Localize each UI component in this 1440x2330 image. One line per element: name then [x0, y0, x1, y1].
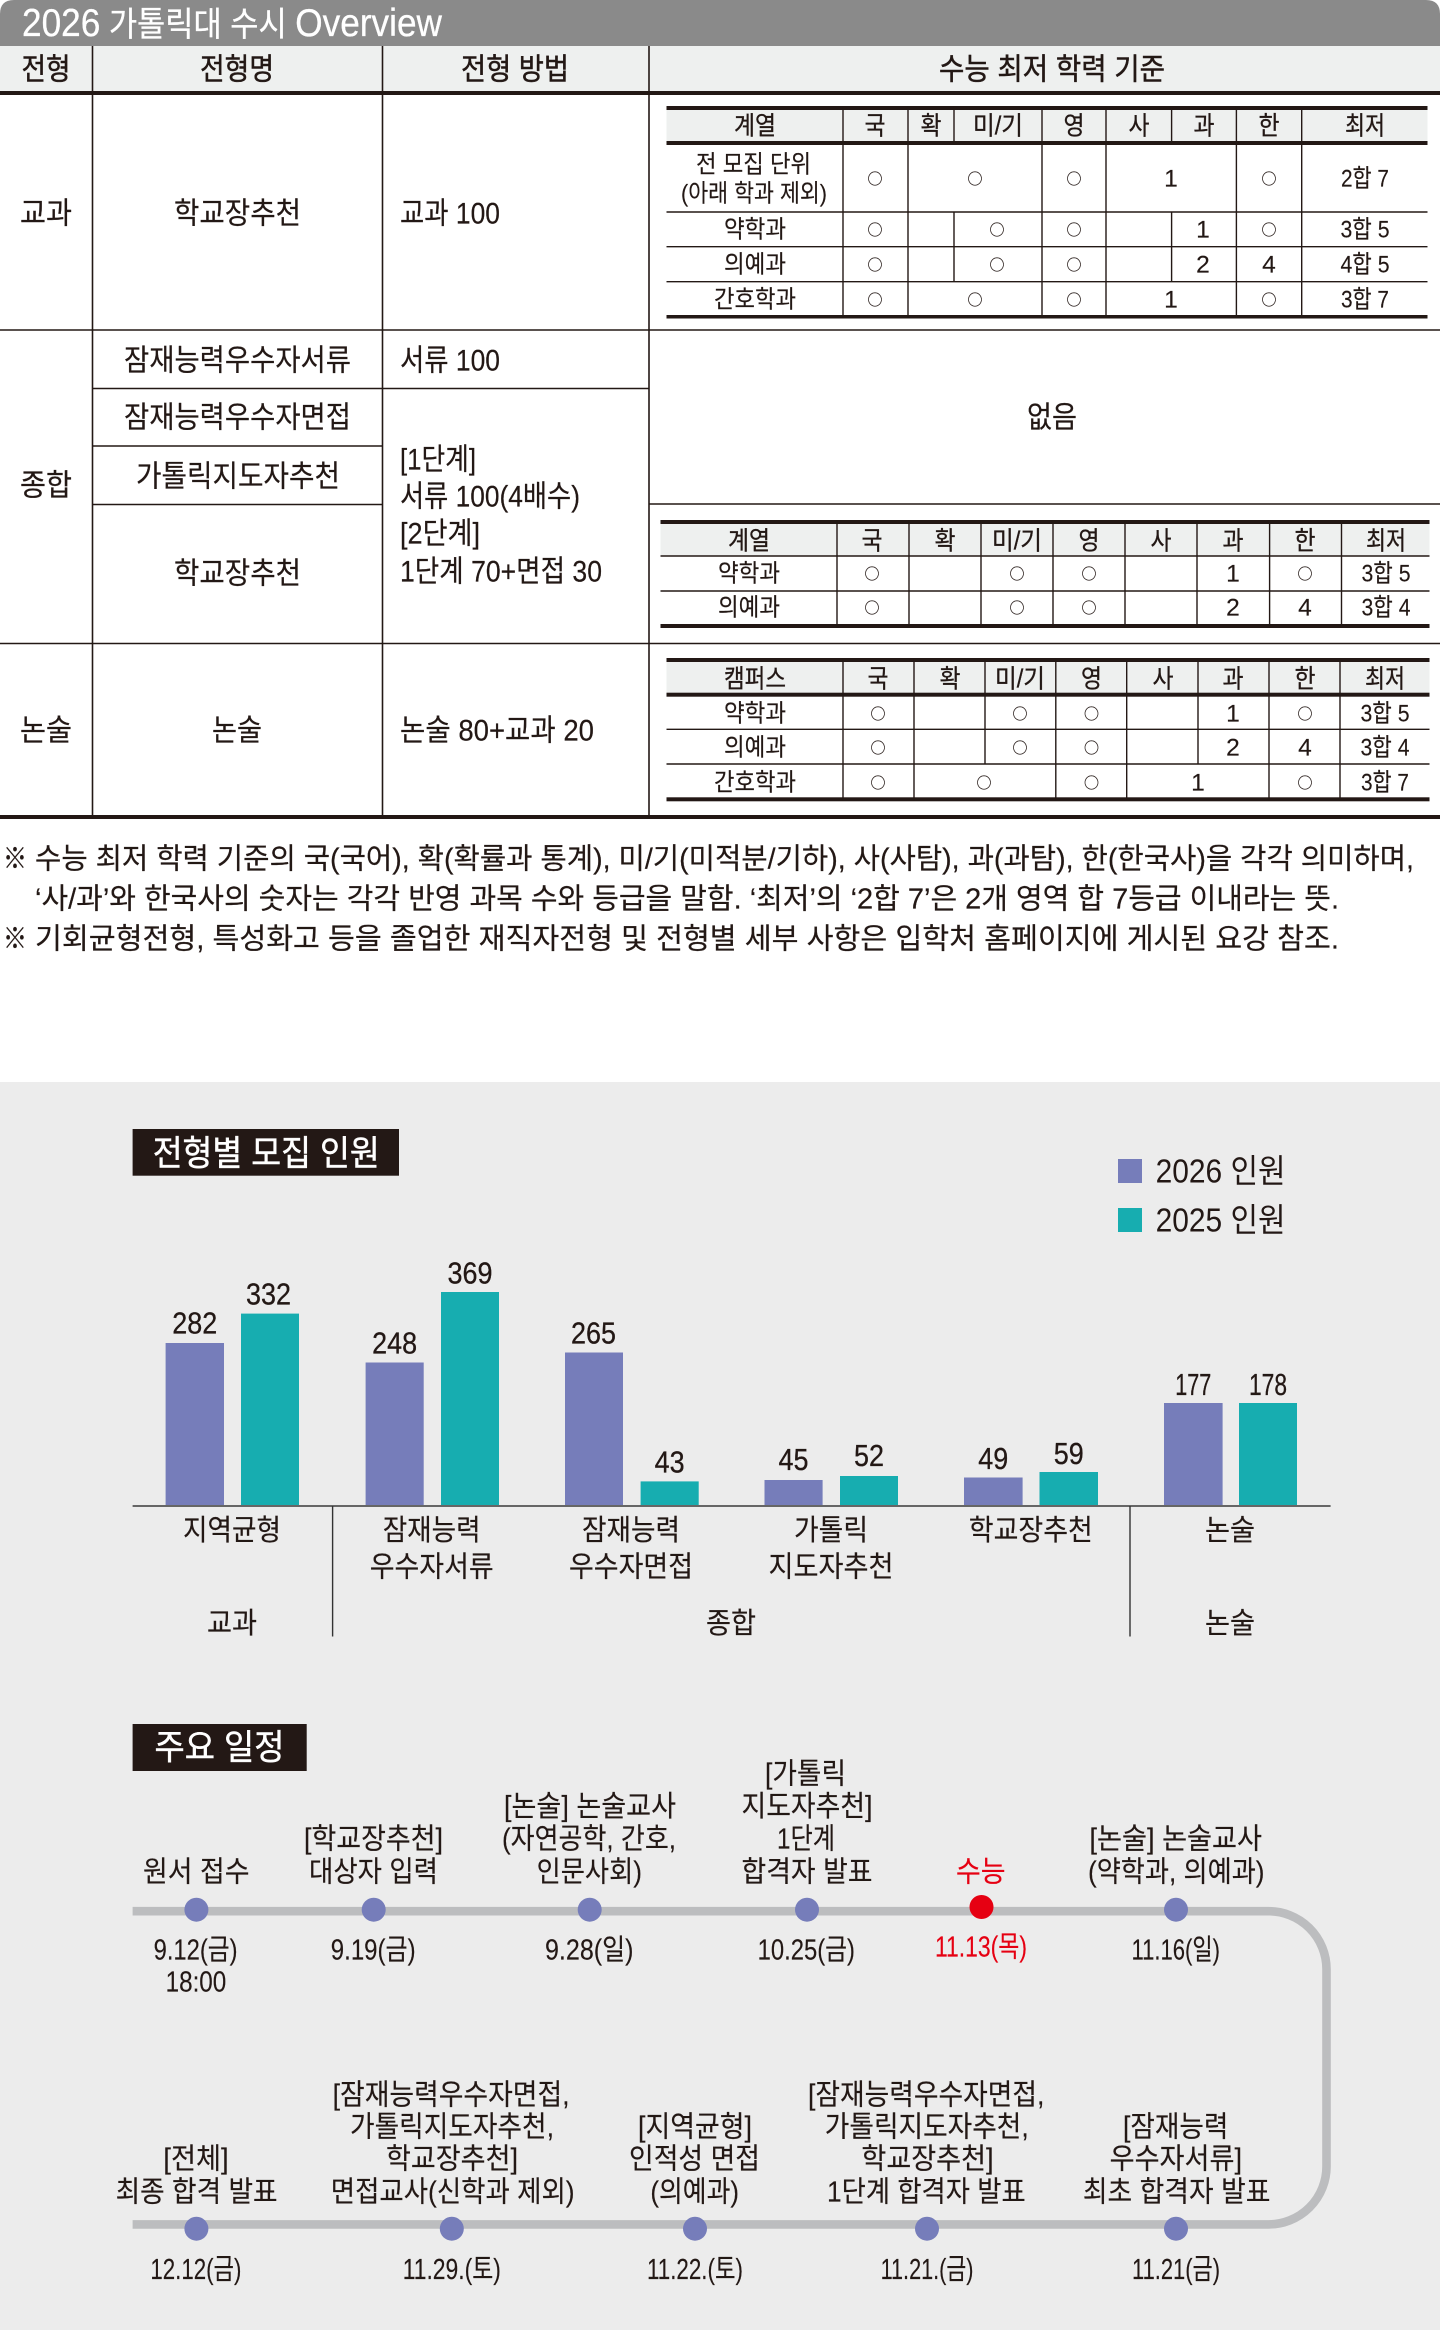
event: first stage results: 11.21.(금) [881, 2254, 974, 2286]
sub-table: 논술 minimum requirements: 확 [940, 665, 960, 693]
admission type names: 논술 [212, 715, 262, 748]
sub-table: 교과 minimum requirements: ○ [1066, 289, 1082, 310]
sub-table: 교과 minimum requirements: 국 [864, 112, 886, 140]
chart category labels: 잠재능력 [383, 1515, 481, 1547]
admission type names: 잠재능력우수자면접 [124, 402, 351, 435]
sub-table: 교과 minimum requirements: 계열 [734, 112, 776, 140]
no minimum requirement label: 없음 [1027, 402, 1077, 435]
sub-table: 학교장추천 minimum requirements: 한 [1294, 527, 1316, 555]
selection methods: 서류 100 [400, 345, 500, 378]
admission type names: 학교장추천 [174, 198, 301, 231]
table grid lines [0, 46, 1440, 819]
event: school recommendation input: 9.19(금) [331, 1935, 416, 1967]
sub-table: 교과 minimum requirements: 최저 [1345, 112, 1385, 140]
table header row: 수능 최저 학력 기준 [939, 54, 1165, 87]
chart category labels: 잠재능력 [582, 1515, 680, 1547]
bar chart: 59 [1054, 1436, 1084, 1471]
event: final results: 12.12(금) [150, 2254, 241, 2286]
sub-table: 논술 minimum requirements: ○ [1084, 772, 1099, 793]
event: essay test 11.16: (약학과, 의예과) [1088, 1856, 1264, 1889]
sub-table: 교과 minimum requirements: 2합 7 [1341, 164, 1389, 192]
sub-table: 논술 minimum requirements: 4 [1298, 734, 1312, 761]
selection methods: 교과 100 [400, 198, 500, 231]
sub-table: 논술 minimum requirements: 국 [868, 665, 888, 693]
heading: key schedule [133, 1724, 307, 1771]
table header row: 전형 방법 [461, 54, 569, 87]
sub-table: 교과 minimum requirements: 1 [1164, 286, 1178, 313]
panel: admissions overview table [0, 0, 1440, 819]
sub-table: 학교장추천 minimum requirements: 1 [1226, 560, 1240, 587]
admission type names: 학교장추천 [174, 558, 301, 591]
sub-table: 논술 minimum requirements: ○ [1084, 737, 1099, 758]
selection methods: [1단계] [400, 444, 476, 477]
sub-table: 논술 minimum requirements: ○ [1084, 703, 1099, 724]
text block: footnotes: ※ [3, 844, 27, 876]
sub-table: 교과 minimum requirements: 한 [1258, 112, 1280, 140]
event: document screening results: 우수자서류] [1110, 2144, 1242, 2176]
sub-table: 논술 minimum requirements: ○ [976, 772, 992, 793]
sub-table: 논술 minimum requirements: ○ [1012, 703, 1028, 724]
event: catholic leader first stage: 1단계 [777, 1823, 835, 1856]
sub-table: 논술 minimum requirements: 미/기 [995, 665, 1045, 693]
sub-table: 학교장추천 minimum requirements: 3합 5 [1362, 559, 1410, 587]
sub-table: 논술 minimum requirements: 간호학과 [714, 768, 796, 796]
bar chart: 282 [172, 1305, 217, 1340]
sub-table: 교과 minimum requirements: 3합 7 [1341, 285, 1389, 313]
event: catholic leader first stage: 합격자 발표 [742, 1857, 872, 1889]
sub-table: 교과 minimum requirements: (아래 학과 제외) [681, 179, 827, 207]
sub-table: 학교장추천 minimum requirements: ○ [1297, 563, 1313, 584]
chart group labels: 논술 [1205, 1608, 1255, 1640]
text block: footnotes [3, 843, 1414, 956]
sub-table: 학교장추천 minimum requirements: 약학과 [718, 559, 780, 587]
bar chart: 178 [1249, 1367, 1287, 1402]
event: interview [331, 2078, 575, 2286]
event: catholic leader first stage [742, 1758, 872, 1967]
bar chart: 52 [854, 1438, 884, 1473]
sub-table: 교과 minimum requirements: ○ [1261, 219, 1277, 240]
timeline dots [184, 1895, 1188, 2241]
sub-table: 논술 minimum requirements: 약학과 [724, 699, 786, 727]
sub-table: 논술 minimum requirements: 3합 5 [1360, 699, 1410, 727]
sub-table: 교과 minimum requirements: 사 [1128, 112, 1150, 140]
sub-table: 교과 minimum requirements: 간호학과 [714, 285, 796, 313]
bar chart: 45 [778, 1442, 808, 1477]
event: aptitude interview: 11.22.(토) [647, 2254, 743, 2286]
sub-table: 교과 minimum requirements: ○ [1066, 168, 1082, 189]
event: document screening results: 11.21(금) [1132, 2254, 1220, 2286]
chart category labels: 논술 [1205, 1515, 1255, 1547]
event: essay test 9.28: 인문사회) [537, 1856, 642, 1889]
sub-table: 학교장추천 minimum requirements [660, 520, 1430, 628]
panel: gray background [0, 1082, 1440, 2330]
sub-table: 논술 minimum requirements: ○ [1297, 703, 1313, 724]
event: catholic leader first stage: [가톨릭 [765, 1758, 846, 1790]
sub-table: 학교장추천 minimum requirements: 확 [934, 527, 956, 555]
sub-table: 교과 minimum requirements: ○ [989, 254, 1005, 275]
sub-table: 논술 minimum requirements: ○ [870, 737, 886, 758]
event: aptitude interview: (의예과) [650, 2177, 739, 2209]
event: first stage results: 학교장추천] [861, 2143, 994, 2176]
legend: 2026 인원 [1156, 1152, 1286, 1190]
bar chart [133, 1255, 1331, 1507]
sub-table: 논술 minimum requirements: 사 [1152, 665, 1174, 693]
event: essay test 9.28: 9.28(일) [545, 1935, 634, 1967]
table header row [0, 46, 1440, 95]
sub-table: 학교장추천 minimum requirements: ○ [1081, 563, 1097, 584]
event: aptitude interview [629, 2111, 760, 2286]
bar chart: 177 [1175, 1367, 1211, 1402]
chart category labels: 지역균형 [183, 1514, 281, 1547]
event: catholic leader first stage: 지도자추천] [742, 1791, 872, 1823]
event: interview: 면접교사(신학과 제외) [331, 2176, 575, 2209]
text block: footnotes: 기회균형전형, 특성화고 등을 졸업한 재직자전형 및 전형별 세부 사항은 입학처 홈페이지에 게시된 요강 참조. [35, 923, 1339, 956]
event: CSAT: 11.13(목) [935, 1932, 1027, 1964]
event: interview: 가톨릭지도자추천, [350, 2112, 554, 2144]
event: catholic leader first stage: 10.25(금) [758, 1935, 855, 1967]
event: interview: 학교장추천] [386, 2143, 518, 2176]
event: application [143, 1857, 250, 1999]
sub-table: 학교장추천 minimum requirements: ○ [1009, 563, 1025, 584]
bar chart: 332 [246, 1276, 291, 1311]
sub-table: 교과 minimum requirements: 1 [1164, 165, 1178, 192]
event: essay test 11.16 [1088, 1824, 1264, 1967]
event: first stage results: 가톨릭지도자추천, [825, 2112, 1029, 2144]
event: aptitude interview: [지역균형] [638, 2111, 752, 2144]
sub-table: 교과 minimum requirements: 약학과 [724, 215, 786, 243]
sub-table: 학교장추천 minimum requirements: 미/기 [992, 527, 1042, 555]
sub-table: 논술 minimum requirements: ○ [1297, 772, 1313, 793]
text block: footnotes: ‘사/과’와 한국사의 숫자는 각각 반영 과목 수와 등급을 말함. ‘최저’의 ‘2합 7’은 2개 영역 합 7등급 이내라는 뜻. [35, 884, 1339, 916]
sub-table: 학교장추천 minimum requirements: 2 [1226, 594, 1240, 621]
sub-table: 교과 minimum requirements: 3합 5 [1340, 215, 1390, 243]
sub-table: 교과 minimum requirements: 확 [920, 112, 942, 140]
sub-table: 교과 minimum requirements: 과 [1194, 112, 1214, 140]
sub-table: 교과 minimum requirements: ○ [967, 289, 983, 310]
sub-table: 논술 minimum requirements: 한 [1294, 665, 1316, 693]
sub-table: 학교장추천 minimum requirements: 계열 [728, 527, 770, 555]
event: application: 9.12(금) [154, 1935, 238, 1967]
legend: 2025 인원 [1156, 1202, 1286, 1238]
sub-table: 교과 minimum requirements: 전 모집 단위 [696, 150, 811, 178]
sub-table: 논술 minimum requirements [666, 658, 1430, 801]
bar chart: 43 [655, 1444, 685, 1479]
sub-table: 논술 minimum requirements: ○ [870, 772, 886, 793]
event: final results: [전체] [163, 2144, 229, 2176]
sub-table: 교과 minimum requirements: ○ [867, 289, 883, 310]
event: final results: 최종 합격 발표 [116, 2177, 278, 2209]
heading: key schedule: 주요 일정 [154, 1729, 284, 1768]
table header row: 전형명 [200, 54, 274, 87]
sub-table: 교과 minimum requirements: ○ [1261, 289, 1277, 310]
event: CSAT: 수능 [956, 1857, 1006, 1889]
sub-table: 학교장추천 minimum requirements: ○ [864, 597, 880, 618]
sub-table: 교과 minimum requirements: ○ [867, 168, 883, 189]
sub-table: 논술 minimum requirements: 2 [1226, 734, 1240, 761]
chart category labels: 우수자면접 [569, 1551, 693, 1584]
event: school recommendation input: 대상자 입력 [309, 1856, 438, 1889]
event: CSAT [935, 1857, 1027, 1964]
sub-table: 학교장추천 minimum requirements: 최저 [1366, 527, 1406, 555]
event: document screening results [1083, 2112, 1270, 2286]
admission type names: 잠재능력우수자서류 [124, 345, 351, 378]
chart group labels [207, 1506, 1255, 1640]
event: essay test 9.28: (자연공학, 간호, [502, 1823, 676, 1856]
event: first stage results: 1단계 합격자 발표 [827, 2176, 1026, 2209]
event: essay test 11.16: [논술] 논술교사 [1090, 1824, 1262, 1856]
category labels [20, 198, 72, 748]
sub-table: 논술 minimum requirements: 1 [1191, 769, 1205, 796]
chart category labels: 우수자서류 [370, 1552, 494, 1584]
text block: footnotes: ※ [3, 924, 27, 956]
event: first stage results: [잠재능력우수자면접, [808, 2078, 1044, 2111]
sub-table: 학교장추천 minimum requirements: 영 [1078, 527, 1100, 555]
event: essay test 11.16: 11.16(일) [1132, 1935, 1220, 1967]
sub-table: 학교장추천 minimum requirements: 국 [862, 527, 882, 555]
sub-table: 학교장추천 minimum requirements: ○ [1009, 597, 1025, 618]
sub-table: 교과 minimum requirements: ○ [989, 219, 1005, 240]
sub-table: 교과 minimum requirements: ○ [1066, 219, 1082, 240]
category labels: 논술 [20, 715, 72, 748]
sub-table: 논술 minimum requirements: 1 [1226, 700, 1240, 727]
sub-table: 교과 minimum requirements: 1 [1196, 216, 1210, 243]
panel: key schedule timeline [116, 1724, 1327, 2286]
bar chart: 369 [448, 1255, 492, 1290]
sub-table: 학교장추천 minimum requirements: 과 [1222, 527, 1244, 555]
sub-table: 학교장추천 minimum requirements: 3합 4 [1362, 593, 1410, 621]
sub-table: 교과 minimum requirements: 4합 5 [1340, 250, 1390, 278]
bar chart: 49 [978, 1441, 1008, 1476]
sub-table: 교과 minimum requirements: 4 [1262, 251, 1276, 278]
chart category labels: 지도자추천 [768, 1552, 894, 1584]
sub-table: 학교장추천 minimum requirements: 4 [1298, 594, 1312, 621]
sub-table: 논술 minimum requirements: 최저 [1365, 665, 1405, 693]
event: document screening results: 최초 합격자 발표 [1083, 2177, 1270, 2209]
sub-table: 논술 minimum requirements: 의예과 [724, 733, 786, 761]
selection methods: 논술 80+교과 20 [400, 715, 594, 748]
timeline track [133, 1911, 1327, 2224]
event: essay test 9.28: [논술] 논술교사 [504, 1791, 676, 1823]
event: interview: [잠재능력우수자면접, [333, 2078, 570, 2111]
sub-table: 논술 minimum requirements: 과 [1222, 665, 1244, 693]
selection methods [400, 198, 602, 748]
event: school recommendation input: [학교장추천] [304, 1823, 443, 1856]
event: first stage results [808, 2078, 1044, 2286]
chart group labels: 종합 [706, 1608, 756, 1640]
selection methods: 서류 100(4배수) [400, 481, 580, 514]
sub-table: 교과 minimum requirements: ○ [1261, 168, 1277, 189]
panel: recruitment chart [133, 1129, 1331, 1640]
chart category labels: 가톨릭 [794, 1515, 868, 1547]
event: application: 18:00 [166, 1967, 226, 1999]
chart group labels: 교과 [207, 1608, 257, 1640]
sub-table: 교과 minimum requirements: 2 [1196, 251, 1210, 278]
event: essay test 9.28 [502, 1791, 676, 1967]
sub-table: 논술 minimum requirements: 3합 4 [1360, 733, 1410, 761]
sub-table: 교과 minimum requirements: 영 [1064, 112, 1084, 140]
admission type names [124, 198, 351, 748]
sub-table: 학교장추천 minimum requirements: ○ [864, 563, 880, 584]
title bar: 2026 가톨릭대 수시 Overview [22, 2, 443, 45]
event: final results [116, 2144, 278, 2286]
category labels: 교과 [20, 198, 72, 231]
sub-table: 교과 minimum requirements [666, 106, 1428, 318]
legend [1118, 1152, 1286, 1238]
bar chart: 248 [372, 1325, 417, 1360]
event: document screening results: [잠재능력 [1123, 2112, 1228, 2144]
sub-table: 논술 minimum requirements: 영 [1081, 665, 1102, 693]
chart category labels: 학교장추천 [969, 1514, 1093, 1547]
event: aptitude interview: 인적성 면접 [629, 2143, 760, 2176]
sub-table: 학교장추천 minimum requirements: 사 [1150, 527, 1172, 555]
event: application: 원서 접수 [143, 1857, 250, 1889]
sub-table: 교과 minimum requirements: 의예과 [724, 250, 786, 278]
sub-table: 학교장추천 minimum requirements: 의예과 [718, 593, 780, 621]
sub-table: 논술 minimum requirements: ○ [870, 703, 886, 724]
sub-table: 교과 minimum requirements: ○ [867, 254, 883, 275]
selection methods: 1단계 70+면접 30 [400, 556, 602, 589]
selection methods: [2단계] [400, 518, 480, 551]
admission type names: 가톨릭지도자추천 [136, 461, 340, 494]
sub-table: 교과 minimum requirements: ○ [1066, 254, 1082, 275]
sub-table: 교과 minimum requirements: ○ [967, 168, 983, 189]
bar chart: 265 [571, 1315, 616, 1350]
sub-table: 논술 minimum requirements: ○ [1012, 737, 1028, 758]
sub-table: 교과 minimum requirements: 미/기 [973, 112, 1023, 140]
event: interview: 11.29.(토) [403, 2254, 501, 2286]
title bar [0, 0, 1440, 46]
heading: recruitment by admission type: 전형별 모집 인원 [153, 1135, 380, 1174]
sub-table: 교과 minimum requirements: ○ [867, 219, 883, 240]
sub-table: 논술 minimum requirements: 캠퍼스 [724, 665, 786, 693]
sub-table: 학교장추천 minimum requirements: ○ [1081, 597, 1097, 618]
chart category labels [183, 1514, 1255, 1584]
category labels: 종합 [20, 470, 72, 503]
text block: footnotes: 수능 최저 학력 기준의 국(국어), 확(확률과 통계), 미/기(미적분/기하), 사(사탐), 과(과탐), 한(한국사)을 각각 의미하며, [35, 843, 1414, 876]
table header row: 전형 [22, 54, 70, 87]
sub-table: 논술 minimum requirements: 3합 7 [1361, 768, 1409, 796]
event: school recommendation input [304, 1823, 443, 1967]
